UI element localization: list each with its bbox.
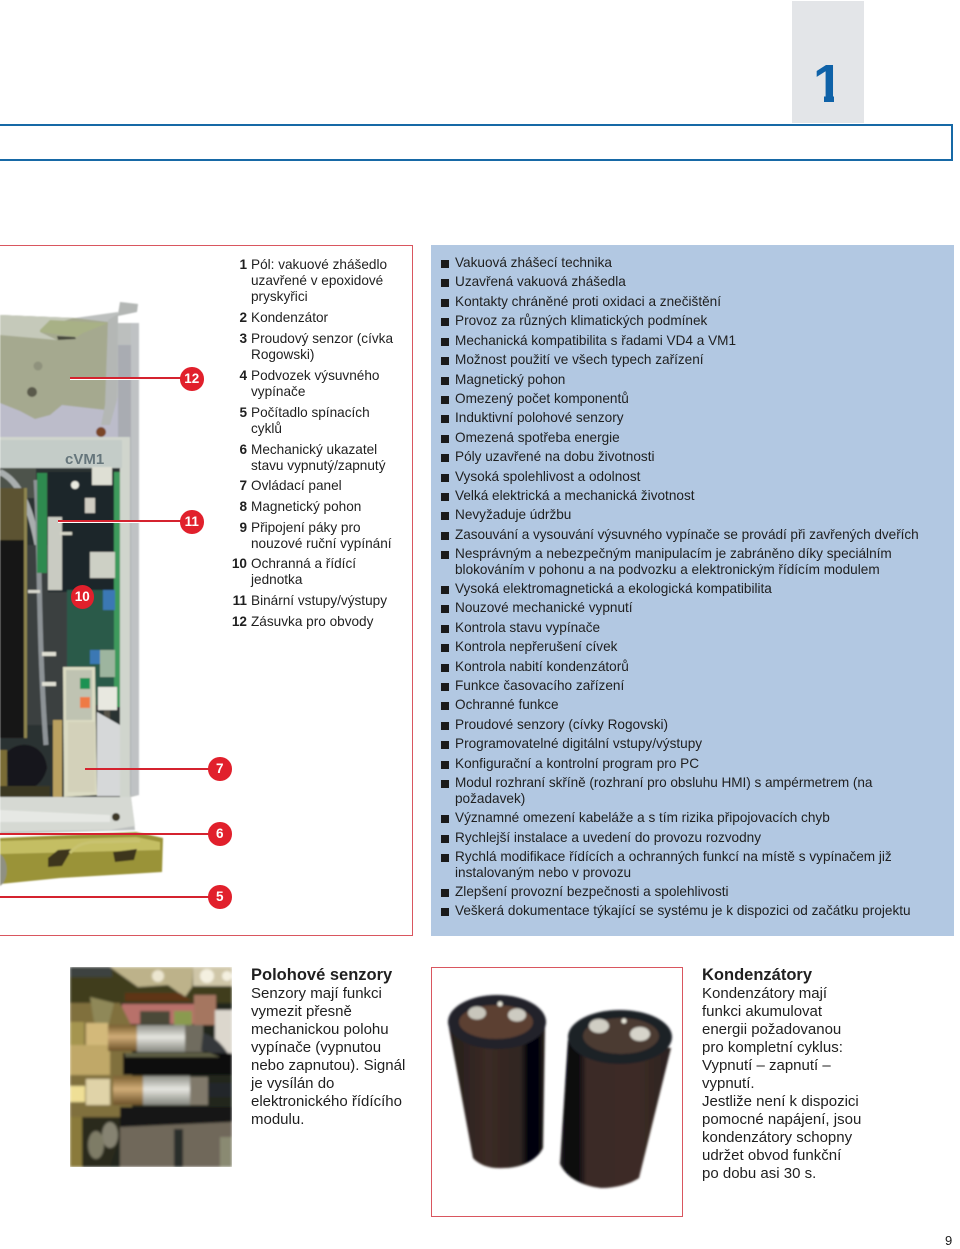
body text: vypínače (vypnutou: [251, 1039, 381, 1056]
numbered parts list: 7: [239, 478, 247, 493]
body text: Senzory mají funkci: [251, 985, 382, 1002]
numbered parts list: Podvozek výsuvného: [251, 368, 379, 383]
body text: je vysílán do: [251, 1075, 334, 1092]
badge 12: 12: [184, 371, 199, 386]
photo: circuit breaker: [0, 301, 164, 886]
badge 10: 10: [75, 589, 90, 604]
badge 6: 6: [216, 826, 224, 841]
panel: features list: Programovatelné digitální vstupy/výstupy: [455, 736, 702, 751]
panel: features list: Kontrola stavu vypínače: [455, 620, 600, 635]
badge 12: [180, 367, 204, 390]
panel: features list: Modul rozhraní skříně (rozhraní pro obsluhu HMI) s ampérmetrem (na: [455, 775, 872, 790]
panel: features list: Vysoká spolehlivost a odolnost: [455, 469, 640, 484]
numbered parts list: pryskyřici: [251, 289, 308, 304]
callout line 6: [0, 833, 220, 835]
numbered parts list: jednotka: [251, 572, 302, 587]
badge 5: 5: [216, 889, 224, 904]
heading: Kondenzátory: [702, 966, 812, 984]
numbered parts list: nouzové ruční vypínání: [251, 536, 392, 551]
panel: features list: Nevyžaduje údržbu: [455, 507, 571, 522]
numbered parts list: Proudový senzor (cívka: [251, 331, 393, 346]
body text: vymezit přesně: [251, 1003, 352, 1020]
panel: features list: Nouzové mechanické vypnutí: [455, 600, 633, 615]
body text: Vypnutí – zapnutí –: [702, 1057, 831, 1074]
photo: position sensors: [70, 967, 232, 1167]
numbered parts list: Binární vstupy/výstupy: [251, 593, 387, 608]
panel: features list: Kontakty chráněné proti oxidaci a znečištění: [455, 294, 721, 309]
body text: pomocné napájení, jsou: [702, 1111, 861, 1128]
body text: kondenzátory schopny: [702, 1129, 852, 1146]
body text: mechanickou polohu: [251, 1021, 389, 1038]
panel: features list: [431, 245, 954, 936]
panel: features list: Funkce časovacího zařízení: [455, 678, 624, 693]
panel: features list: Magnetický pohon: [455, 372, 565, 387]
block: position sensors text: [250, 966, 405, 1128]
numbered parts list: Pól: vakuové zhášedlo: [251, 257, 387, 272]
panel: features list: blokováním v pohonu a na podvozku a elektronickým řídícím modulem: [455, 562, 880, 577]
numbered parts list: Počítadlo spínacích: [251, 405, 370, 420]
body text: udržet obvod funkční: [702, 1147, 841, 1164]
block: capacitors text: [702, 966, 861, 1182]
numbered parts list: 11: [233, 593, 247, 608]
panel: features list: Póly uzavřené na dobu životnosti: [455, 449, 654, 464]
badge 7: 7: [216, 761, 224, 776]
body text: modulu.: [251, 1111, 304, 1128]
callout line 12: [70, 377, 193, 380]
numbered parts list: [232, 257, 394, 629]
body text: nebo zapnutou). Signál: [251, 1057, 405, 1074]
panel: features list: Induktivní polohové senzory: [455, 410, 624, 425]
body text: Jestliže není k dispozici: [702, 1093, 859, 1110]
panel: features list: Provoz za různých klimatických podmínek: [455, 313, 707, 328]
panel: features list: Omezený počet komponentů: [455, 391, 629, 406]
chapter number: 1: [813, 54, 843, 114]
body text: energii požadovanou: [702, 1021, 841, 1038]
panel: features list: Rychlá modifikace řídících a ochranných funkcí na místě s vypínačem již: [455, 849, 892, 864]
badge 10: [70, 585, 94, 608]
chapter tab: [792, 1, 864, 123]
numbered parts list: Magnetický pohon: [251, 499, 361, 514]
panel: features list: požadavek): [455, 791, 525, 806]
photo: capacitors: [431, 967, 683, 1217]
numbered parts list: 4: [239, 368, 247, 383]
numbered parts list: Ovládací panel: [251, 478, 342, 493]
panel: features list: Vysoká elektromagnetická a ekologická kompatibilita: [455, 581, 772, 596]
numbered parts list: 8: [239, 499, 247, 514]
panel: features list: Proudové senzory (cívky Rogovski): [455, 717, 668, 732]
panel: features list: Zasouvání a vysouvání výsuvného vypínače se provádí při zavřených dveřích: [455, 527, 919, 542]
label on breaker: cVM1: [65, 451, 104, 468]
numbered parts list: uzavřené v epoxidové: [251, 273, 383, 288]
body text: vypnutí.: [702, 1075, 755, 1092]
numbered parts list: 12: [232, 614, 247, 629]
badge 6: [208, 822, 232, 846]
badge 11: 11: [185, 514, 199, 529]
panel: features list: Uzavřená vakuová zhášedla: [455, 274, 626, 289]
panel: features list: Kontrola nepřerušení cívek: [455, 639, 617, 654]
panel: features list: Ochranné funkce: [455, 697, 559, 712]
numbered parts list: 2: [239, 310, 247, 325]
panel: features list: Zlepšení provozní bezpečnosti a spolehlivosti: [455, 884, 729, 899]
panel: features list: Mechanická kompatibilita s řadami VD4 a VM1: [455, 333, 736, 348]
body text: [250, 985, 405, 1128]
badge 7: [208, 757, 232, 780]
numbered parts list: Připojení páky pro: [251, 520, 361, 535]
badge 5: [208, 885, 232, 908]
numbered parts list: Zásuvka pro obvody: [251, 614, 373, 629]
body text: pro kompletní cyklus:: [702, 1039, 843, 1056]
numbered parts list: 5: [239, 405, 247, 420]
numbered parts list: Rogowski): [251, 347, 314, 362]
numbered parts list: 9: [239, 520, 247, 535]
badge 11: [180, 510, 204, 534]
numbered parts list: vypínače: [251, 384, 305, 399]
panel: features list: Rychlejší instalace a uvedení do provozu rozvodny: [455, 830, 761, 845]
numbered parts list: cyklů: [251, 421, 282, 436]
panel: features list: Velká elektrická a mechanická životnost: [455, 488, 695, 503]
page number: 9: [945, 1233, 952, 1248]
panel: features list: Nesprávným a nebezpečným manipulacím je zabráněno díky speciálním: [455, 546, 892, 561]
panel: features list: Kontrola nabití kondenzátorů: [455, 659, 629, 674]
panel: features list: Konfigurační a kontrolní program pro PC: [455, 756, 699, 771]
callout line 5: [0, 896, 220, 898]
panel: features list: Významné omezení kabeláže a s tím rizika připojovacích chyb: [455, 810, 830, 825]
callout line 11: [58, 520, 193, 523]
body text: Kondenzátory mají: [702, 985, 827, 1002]
body text: funkci akumulovat: [702, 1003, 822, 1020]
panel: features list: instalovaným nebo v provozu: [455, 865, 631, 880]
numbered parts list: 3: [239, 331, 247, 346]
body text: [702, 985, 861, 1182]
heading: Polohové senzory: [251, 966, 392, 984]
panel: features list: Vakuová zhášecí technika: [455, 255, 612, 270]
header bar: [0, 124, 953, 161]
numbered parts list: stavu vypnutý/zapnutý: [251, 458, 386, 473]
numbered parts list: 6: [239, 442, 247, 457]
panel: features list: Veškerá dokumentace týkající se systému je k dispozici od začátku projektu: [455, 903, 911, 918]
numbered parts list: 1: [239, 257, 247, 272]
numbered parts list: 10: [232, 556, 247, 571]
numbered parts list: Mechanický ukazatel: [251, 442, 377, 457]
panel: features list: Omezená spotřeba energie: [455, 430, 620, 445]
numbered parts list: Kondenzátor: [251, 310, 328, 325]
body text: po dobu asi 30 s.: [702, 1165, 816, 1182]
callout line 7: [85, 768, 220, 770]
panel: features list: Možnost použití ve všech typech zařízení: [455, 352, 704, 367]
panel: breaker photo with callouts: [0, 245, 413, 936]
numbered parts list: Ochranná a řídící: [251, 556, 356, 571]
body text: elektronického řídícího: [251, 1093, 402, 1110]
